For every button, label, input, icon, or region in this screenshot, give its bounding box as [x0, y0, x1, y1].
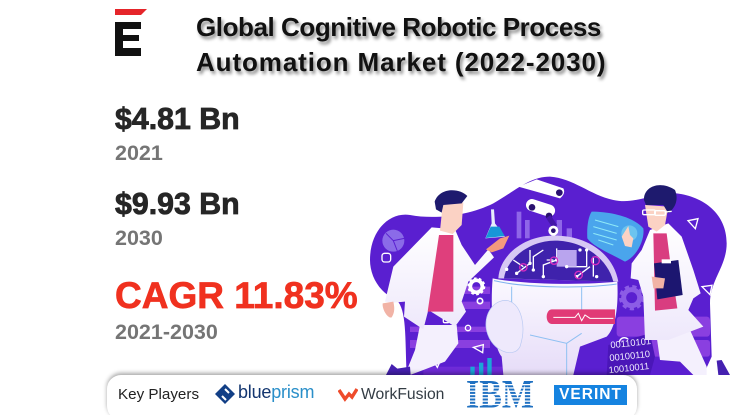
binary code panel: [606, 333, 655, 375]
binary code panel: 00100110: [609, 349, 651, 363]
scientist right: [622, 185, 730, 375]
purple background blob: [370, 177, 727, 375]
stat: 2021 market value: $4.81 Bn: [115, 103, 240, 136]
data bars behind arm: [517, 212, 572, 238]
label: key players: Key Players: [118, 386, 199, 403]
stat label: 2021-2030: 2021-2030: [115, 320, 218, 344]
scientist left: [383, 190, 509, 375]
robot head: [486, 236, 618, 375]
stat: 2030 market value: $9.93 Bn: [115, 188, 240, 221]
title: Global Cognitive Robotic Process: [196, 12, 601, 42]
holographic screen: [587, 212, 644, 262]
binary code panel: 10010011: [608, 361, 650, 375]
logo: Blue Prism: [215, 382, 314, 404]
key players panel: [107, 375, 637, 415]
logo: Blue Prism: blueprism: [238, 382, 314, 402]
logo: WorkFusion: WorkFusion: [361, 386, 444, 403]
stat label: 2021: 2021: [115, 141, 163, 165]
stat: CAGR: CAGR 11.83%: [115, 275, 358, 316]
gear icons: [468, 278, 643, 309]
title: Automation Market (2022-2030): [196, 47, 606, 77]
illustration: scientists and robot: [370, 176, 730, 375]
stat label: 2030: 2030: [115, 226, 163, 250]
binary code panel: 00110101: [610, 336, 652, 350]
robot arm: [518, 179, 564, 241]
server rack stripes: [407, 287, 710, 357]
decorative outlines: [382, 219, 712, 374]
title: [196, 12, 608, 82]
pie icon: [382, 230, 404, 252]
logo: [115, 9, 147, 56]
logo: Verint: VERINT: [559, 386, 622, 403]
bar chart: [470, 358, 492, 375]
